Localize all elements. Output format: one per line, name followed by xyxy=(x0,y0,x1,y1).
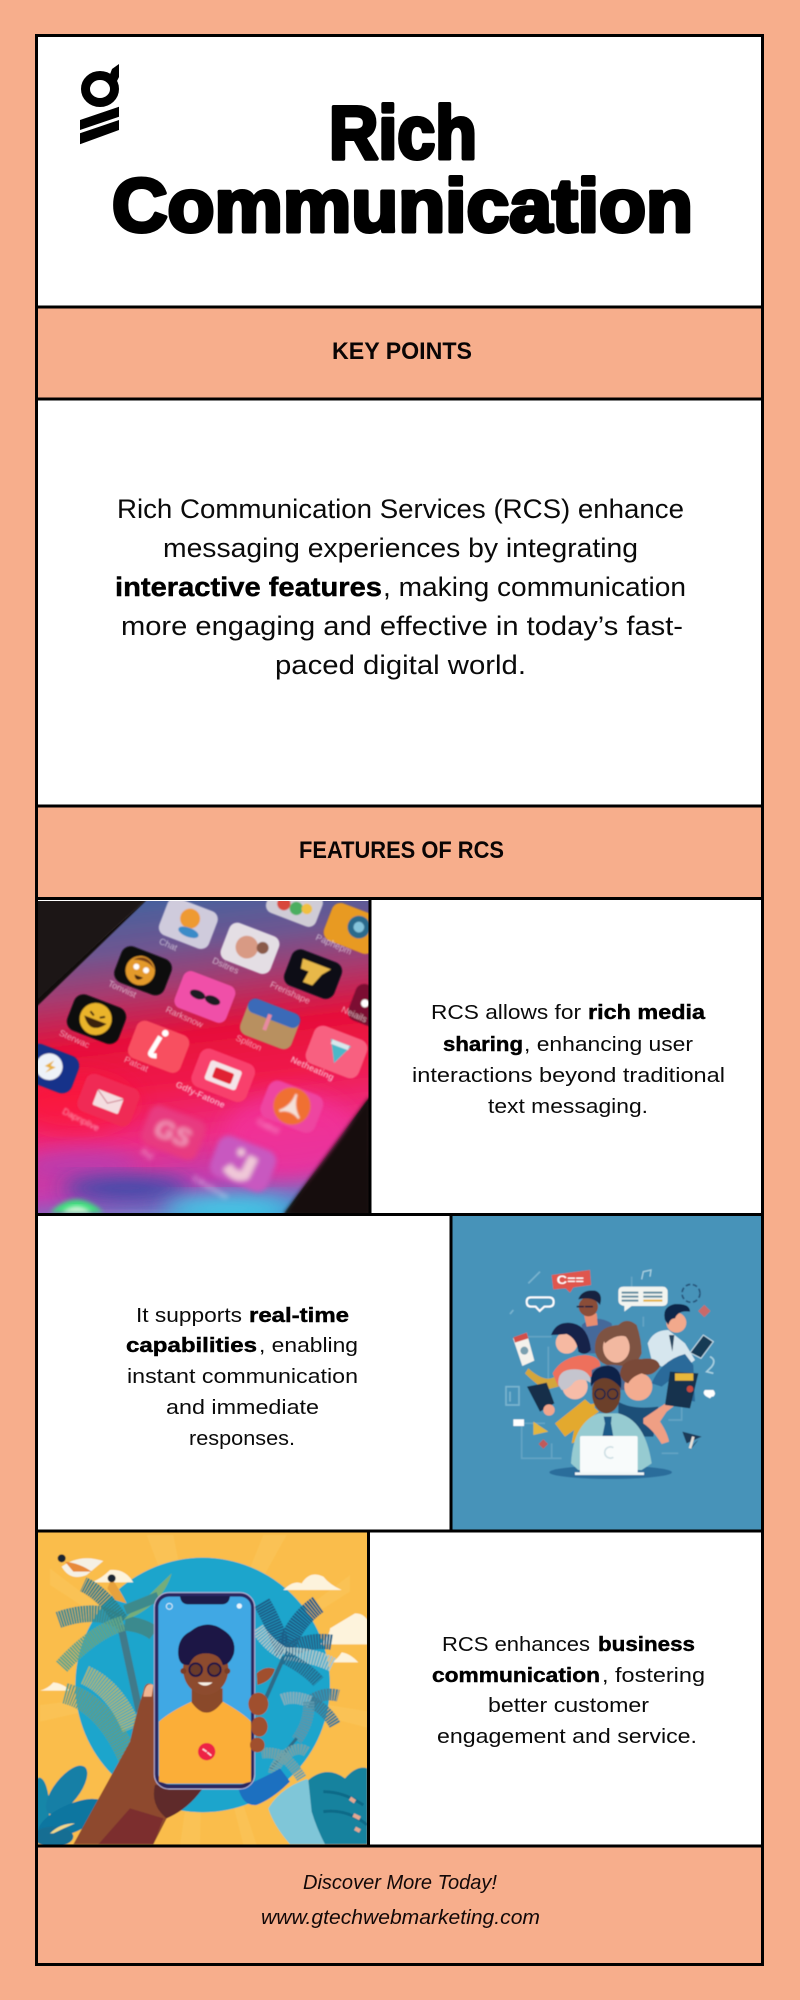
text: feature 3: engagement and service. xyxy=(437,1725,697,1748)
text: feature 3: business xyxy=(598,1633,695,1656)
title xyxy=(112,90,693,248)
person with glasses, back xyxy=(577,1291,615,1353)
panel: footer call to action xyxy=(36,1846,763,1964)
image: smartphone app icons: Dapnplive xyxy=(61,1106,101,1133)
text: feature 1: , enhancing user xyxy=(524,1033,693,1056)
heading: key points: KEY POINTS xyxy=(332,338,472,365)
image: smartphone app icons: Tonviist xyxy=(107,978,138,1000)
text: feature 3: better customer xyxy=(488,1694,649,1717)
image: smartphone app icons: Gdfy-Fatone xyxy=(174,1079,227,1110)
panel: key points text: interactive features xyxy=(115,572,382,602)
text: feature 2: responses. xyxy=(189,1427,295,1450)
image: smartphone app icons: Spliton xyxy=(234,1033,263,1053)
heading: features of RCS xyxy=(36,806,763,898)
palm right xyxy=(257,1602,338,1778)
woman on the left with phone xyxy=(513,1323,600,1390)
image: smartphone app icons: Gabol xyxy=(255,1116,281,1136)
image: smartphone app icons: Neiails xyxy=(340,1004,369,1025)
panel: key points text: messaging experiences by integrating xyxy=(163,533,638,563)
panel: footer call to action: www.gtechwebmarketing.com xyxy=(261,1907,540,1929)
text: feature 2: and immediate xyxy=(166,1396,319,1419)
woman with grey hair xyxy=(527,1369,599,1443)
title: Rich xyxy=(329,90,477,174)
text: feature 2: real-time xyxy=(249,1304,349,1327)
image: group of people with devices xyxy=(450,1213,765,1533)
panel: key points text: Rich Communication Services (RCS) enhance xyxy=(117,494,684,524)
panel: feature 3 row xyxy=(29,1530,763,1847)
text: feature 1 xyxy=(412,1001,725,1118)
panel: key points text: more engaging and effective in today’s fast- xyxy=(121,611,683,641)
image: smartphone app icons: Paphepm xyxy=(314,932,353,957)
text: feature 1: interactions beyond traditional xyxy=(412,1064,725,1087)
heading: features of RCS: FEATURES OF RCS xyxy=(299,837,504,864)
panel: key points text xyxy=(36,399,763,806)
text: feature 1: text messaging. xyxy=(488,1095,648,1118)
image: smartphone app icons: Chat xyxy=(158,936,179,953)
image: smartphone app icons: Kilhehmer xyxy=(191,1173,231,1202)
hand xyxy=(73,1682,168,1844)
leaves bottom xyxy=(38,1765,367,1844)
text: feature 2: instant communication xyxy=(127,1365,358,1388)
image: group of people with devices: C== xyxy=(557,1273,584,1287)
panel: feature 2 row xyxy=(36,1213,765,1533)
panel: footer call to action: Discover More Today! xyxy=(303,1872,497,1894)
image: smartphone app icons: Rarksnow xyxy=(164,1004,205,1030)
text: feature 3: communication xyxy=(432,1664,600,1687)
phone xyxy=(154,1593,255,1789)
icon: logo mark xyxy=(80,64,119,144)
panel: feature 1 row xyxy=(17,879,763,1220)
man in center with laptop xyxy=(571,1366,652,1475)
person on the right with tablet xyxy=(648,1304,713,1402)
text: feature 2 xyxy=(126,1304,358,1450)
panel: key points text: , making communication xyxy=(383,572,686,602)
image: smartphone app icons: Netheating xyxy=(289,1054,336,1082)
text: feature 1: RCS allows for xyxy=(431,1001,581,1024)
text: feature 2: It supports xyxy=(136,1304,242,1327)
title: Communication xyxy=(112,164,693,248)
palm left xyxy=(58,1573,172,1762)
text: feature 1: sharing xyxy=(443,1033,523,1056)
text: feature 3 xyxy=(432,1633,705,1748)
birds xyxy=(58,1554,127,1603)
image: smartphone app icons: Dsitres xyxy=(211,955,241,976)
image: hand holding phone with video call xyxy=(29,1530,372,1847)
clouds xyxy=(40,1570,367,1691)
man with brown hair and calculator xyxy=(618,1359,698,1444)
image: smartphone app icons: Patcat xyxy=(123,1054,150,1074)
person on screen xyxy=(159,1625,251,1784)
text: feature 1: rich media xyxy=(588,1001,706,1024)
image: smartphone app icons: Rsl xyxy=(139,1146,155,1162)
image: smartphone app icons xyxy=(38,901,368,1213)
text: feature 3: RCS enhances xyxy=(442,1633,590,1656)
text: feature 2: capabilities xyxy=(126,1334,257,1357)
text: feature 2: , enabling xyxy=(259,1334,358,1357)
woman in center xyxy=(592,1321,642,1390)
fingers xyxy=(248,1668,275,1752)
image: smartphone app icons: Sterwac xyxy=(58,1028,92,1050)
image: smartphone app icons: Frerishape xyxy=(269,979,312,1006)
image: smartphone app icons: GS xyxy=(150,1114,195,1153)
panel: title xyxy=(36,35,763,307)
heading: key points xyxy=(36,307,763,399)
text: feature 3: , fostering xyxy=(602,1664,705,1687)
panel: key points text: paced digital world. xyxy=(275,650,526,680)
